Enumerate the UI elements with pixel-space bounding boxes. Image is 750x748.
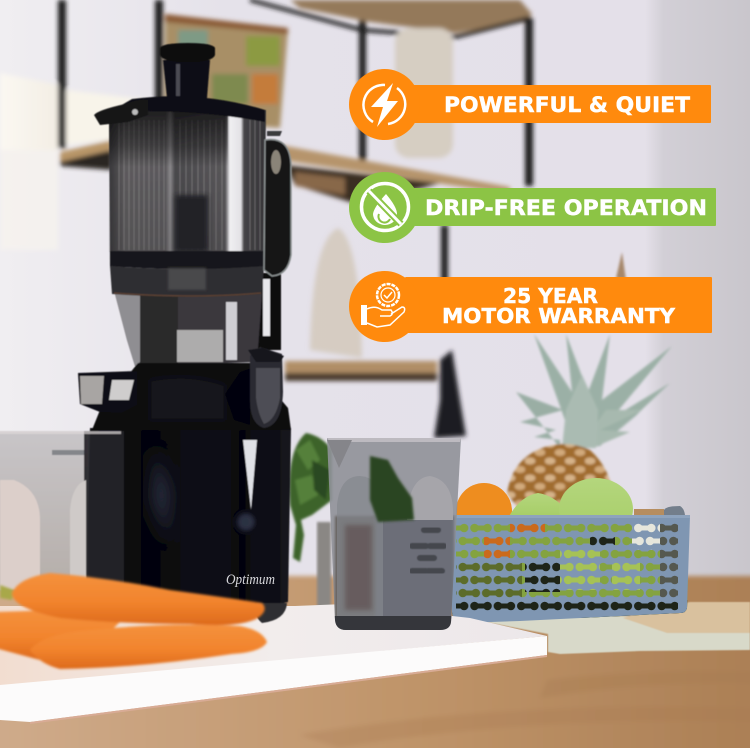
third shelf underside: [285, 373, 437, 381]
container body: [0, 431, 88, 591]
badge circle: [349, 271, 420, 342]
top shelf frame: [250, 0, 530, 37]
spout chrome small: [109, 380, 134, 400]
logo: Optimum: [226, 572, 275, 588]
apple left: [510, 493, 560, 515]
lid: [110, 96, 265, 122]
window right: [407, 476, 453, 520]
hand outline: [367, 307, 405, 327]
rug: [475, 602, 750, 654]
icon drop: [373, 194, 397, 225]
collar rim: [114, 293, 261, 296]
left glass container: [0, 431, 124, 591]
latch top: [248, 348, 284, 362]
container arch right: [70, 480, 86, 590]
seal inner: [381, 288, 395, 302]
jug rim: [327, 438, 461, 442]
pineapple: [507, 252, 672, 510]
chamber light left: [115, 294, 140, 366]
kale: [289, 433, 332, 562]
leaves left: [516, 392, 563, 448]
bowl lower band: [110, 251, 265, 269]
contents light patches: [560, 548, 640, 590]
handle clasp: [267, 131, 282, 136]
art colour two: [246, 36, 280, 66]
board top: [0, 604, 547, 686]
contents base: [452, 518, 688, 618]
bowl: [109, 110, 266, 267]
icon: hand with seal: [361, 284, 405, 327]
top shelf wood: [290, 0, 532, 33]
basket contents seen through holes: [452, 518, 688, 618]
right latch: [225, 347, 284, 428]
jug reflections: [333, 456, 455, 632]
lid clasp: [132, 109, 138, 115]
second shelf frame: [285, 165, 440, 205]
icon bolt: [371, 83, 398, 127]
latch shade: [225, 368, 251, 425]
motor base body: [86, 428, 291, 606]
column highlight: [263, 279, 270, 336]
icon ring: [363, 85, 405, 124]
seal: [377, 284, 399, 306]
sunlit wall patches: [0, 73, 58, 150]
sunlit lower: [0, 150, 58, 250]
art colour three: [212, 74, 248, 104]
base foot: [254, 603, 287, 623]
shoulder: [92, 363, 291, 430]
basket: [450, 506, 690, 623]
badge bar: [405, 188, 716, 226]
pot behind jug: [317, 522, 331, 607]
feed chute neck: [163, 60, 210, 98]
neck highlight: [176, 64, 180, 96]
wood surface: [0, 576, 750, 748]
board front: [0, 636, 547, 722]
feature badge: drip-free operation: [349, 172, 716, 243]
vase: [395, 28, 453, 158]
container dark overlap: [84, 431, 124, 591]
base highlight streak: [243, 440, 257, 510]
carrot stem: [0, 585, 14, 600]
lower chamber: [115, 294, 262, 366]
window left lower: [345, 525, 372, 610]
icon: lightning bolt: [363, 83, 405, 127]
badge text: DRIP-FREE OPERATION: [425, 196, 707, 220]
juicer: [78, 43, 291, 623]
badge text line 1: 25 YEAR: [503, 284, 598, 308]
base blurred spot: [237, 513, 255, 531]
lower panel: [372, 516, 454, 620]
wood streak two: [300, 707, 750, 748]
badge circle: [349, 172, 420, 243]
base blurred reflection: [150, 450, 172, 540]
wood bowl edge: [634, 509, 664, 515]
tabletop: [0, 576, 750, 748]
apple right: [560, 478, 633, 515]
badge bar: [405, 85, 711, 123]
fruit in basket: [456, 478, 633, 515]
chamber dark: [140, 294, 178, 364]
shelf uprights: [58, 0, 533, 282]
carrot front: [30, 625, 267, 669]
gold bokeh figure: [310, 228, 362, 358]
kale shade: [312, 460, 330, 500]
contents white: [632, 524, 660, 550]
badge circle: [349, 69, 420, 140]
icon: no drip: [362, 184, 408, 230]
shelf left underside: [60, 150, 112, 170]
contents dark patches: [452, 535, 688, 618]
leaves right: [580, 410, 642, 448]
orange: [456, 483, 512, 515]
leaves back: [534, 334, 672, 448]
leaves centre: [562, 375, 598, 448]
chamber highlight: [226, 302, 237, 360]
jug spout: [327, 440, 352, 468]
icon ring: [362, 184, 408, 230]
latch body: [250, 347, 283, 428]
basket rim: [450, 515, 690, 518]
kale reflected: [370, 456, 414, 522]
spout housing: [78, 371, 137, 413]
art frame: [165, 14, 288, 128]
contents orange: [484, 524, 545, 558]
shoulder sheen: [150, 377, 225, 420]
badge text: POWERFUL & QUIET: [444, 93, 691, 117]
sunlit patch two: [66, 90, 150, 145]
badge text line 2: MOTOR WARRANTY: [442, 304, 676, 328]
latch highlight: [256, 368, 280, 424]
carrots: [0, 573, 267, 669]
dark figure: [434, 350, 466, 438]
lower holes: [412, 530, 444, 571]
contents left dark: [452, 560, 522, 615]
kale mass: [289, 433, 332, 562]
wood streak: [540, 671, 750, 698]
art colour one: [178, 30, 208, 56]
spout chrome: [80, 376, 104, 404]
basket handle: [664, 506, 685, 515]
cutting board: [0, 604, 547, 724]
handle hole: [271, 150, 281, 174]
third shelf wood: [285, 361, 437, 374]
rug pale: [475, 616, 750, 654]
contents right grey: [660, 522, 685, 617]
bowl top shade: [109, 110, 228, 252]
icon drop inner: [378, 214, 390, 223]
art strip: [165, 14, 288, 34]
background: blurred shelving: [0, 0, 533, 438]
art colour four: [252, 74, 278, 104]
carrot left: [0, 610, 120, 660]
window left: [337, 476, 383, 620]
rear column: [257, 273, 281, 350]
container rim: [0, 431, 121, 434]
left lid handle: [94, 100, 148, 125]
carrot top: [12, 573, 265, 625]
bowl ribs: [119, 120, 260, 250]
strainer: [177, 330, 223, 362]
pineapple tip: [616, 252, 626, 280]
collar highlight: [168, 268, 206, 290]
feature badge: powerful and quiet: [349, 69, 711, 140]
left spout: [78, 371, 137, 413]
seal check: [384, 292, 392, 298]
second shelf underside: [295, 172, 345, 195]
bowl collar: [110, 266, 264, 297]
container top dark: [52, 450, 84, 455]
shelf left wood: [60, 140, 112, 162]
jug body: [327, 438, 461, 630]
pineapple body: [507, 444, 614, 510]
measuring jug: [327, 438, 461, 632]
board bottom edge: [30, 655, 547, 724]
icon slash gap: [369, 191, 401, 224]
basket shell: [450, 516, 690, 623]
badge bar: [405, 277, 712, 333]
container arch left: [0, 480, 40, 590]
rug tan: [623, 602, 750, 633]
left column: [335, 516, 375, 620]
kale highlight: [295, 440, 320, 505]
feature badge: 25 year motor warranty: [349, 271, 712, 342]
right handle: [264, 140, 291, 276]
jug base: [334, 616, 452, 630]
feed chute cap: [160, 43, 215, 62]
icon slash: [369, 191, 401, 224]
second shelf wood: [280, 145, 510, 194]
hand cuff: [361, 305, 367, 325]
bowl centre dark: [175, 195, 208, 252]
